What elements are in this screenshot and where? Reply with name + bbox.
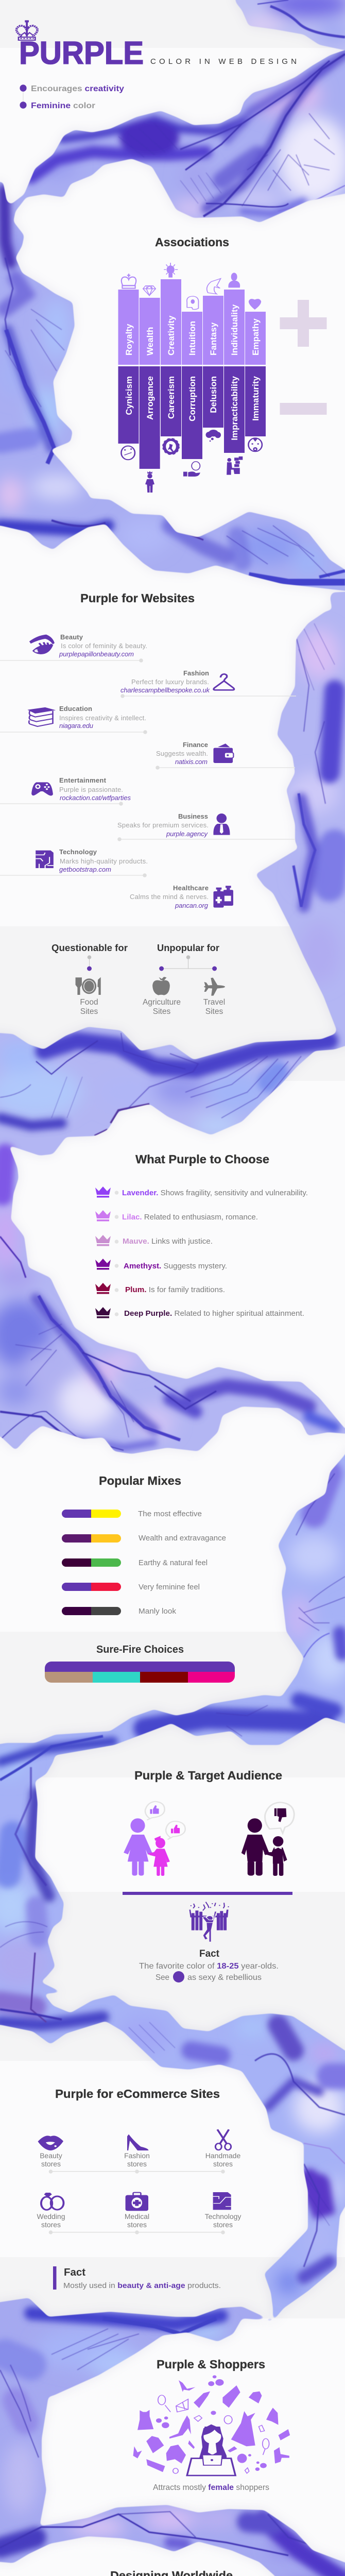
item: agriculture sites: Agriculture: [143, 998, 181, 1007]
item: food sites: Sites: [80, 1007, 98, 1016]
chart: negative associations: Arrogance: [145, 376, 155, 420]
heading: questionable for: Questionable for: [51, 943, 128, 953]
chart: positive associations: Creativity: [166, 315, 176, 355]
row: fashion: Fashion: [183, 669, 209, 677]
chart: negative associations: Delusion: [209, 376, 218, 413]
divider bar: [123, 1892, 292, 1895]
row: beauty: Is color of feminity & beauty.: [61, 642, 147, 650]
ribbon: upper swirl and left column: [0, 26, 345, 618]
chart: negative associations: Careerism: [166, 376, 176, 419]
row: finance: natixis.com: [175, 758, 208, 766]
chart: positive associations: Fantasy: [209, 322, 218, 355]
connectors: [49, 2170, 225, 2234]
item: agriculture sites: [143, 977, 181, 1016]
item: fashion stores: Fashion: [124, 2151, 150, 2160]
chart: negative associations: Impracticability: [230, 376, 239, 440]
item: handmade stores: stores: [213, 2160, 233, 2168]
chart: negative associations: Immaturity: [251, 376, 261, 421]
heading: popular mixes: Popular Mixes: [99, 1474, 181, 1487]
icon: royal crown: [16, 20, 38, 40]
row: fashion: Perfect for luxury brands.: [131, 678, 209, 686]
chart: negative associations: Corruption: [187, 376, 197, 421]
mix: plum and charcoal: Manly look: [139, 1607, 177, 1616]
row: technology: getbootstrap.com: [59, 866, 111, 873]
row: technology: Technology: [59, 848, 97, 856]
item: mauve: [95, 1235, 213, 1246]
row: healthcare: Calms the mind & nerves.: [130, 893, 209, 901]
flow bands: [0, 2313, 345, 2576]
text: mostly used: Mostly used in beauty & anti-age products.: [63, 2282, 221, 2290]
panel: sure-fire choices: [45, 1644, 235, 1683]
ribbon: shoppers band and lower wave: [0, 2282, 345, 2576]
ribbon: right column, wide band and second swirl: [0, 577, 345, 1463]
heading: what purple to choose: What Purple to Choose: [135, 1153, 269, 1166]
item: wedding stores: stores: [41, 2221, 61, 2229]
chart: positive associations: Intuition: [187, 321, 197, 355]
item: fashion stores: [124, 2134, 150, 2168]
item: deep purple: Deep Purple. Related to higher spiritual attainment.: [124, 1309, 304, 1318]
item: food sites: [76, 977, 101, 1016]
row: healthcare: pancan.org: [175, 902, 209, 909]
item: lilac: [95, 1210, 258, 1222]
row: entertainment: rockaction.cat/wtfparties: [60, 794, 131, 802]
row: finance: Suggests wealth.: [156, 750, 208, 757]
item: plum: [95, 1283, 225, 1294]
bullet: feminine color: Feminine color: [31, 101, 95, 110]
item: travel sites: Sites: [205, 1007, 223, 1016]
item: handmade stores: [205, 2129, 240, 2168]
fact accent bar: [53, 2266, 57, 2290]
mix: plum and charcoal: [62, 1607, 177, 1616]
figure: father and son: [242, 1802, 294, 1876]
figure: mother and daughter: [124, 1802, 185, 1876]
item: beauty stores: Beauty: [40, 2151, 62, 2160]
chart: positive associations: Individuality: [230, 304, 239, 355]
flow bands: [0, 1473, 345, 2277]
row: entertainment: Purple is passionate.: [59, 786, 123, 793]
row: entertainment: Entertainment: [59, 776, 107, 784]
swatch bar: [45, 1662, 235, 1683]
item: agriculture sites: Sites: [153, 1007, 170, 1016]
heading: purple and target audience: Purple & Target Audience: [134, 1769, 282, 1782]
item: travel sites: [203, 978, 225, 1016]
chart: positive associations: Wealth: [145, 327, 155, 355]
illustration: shopper and goods: [133, 2375, 290, 2476]
icons: top row: [122, 263, 261, 310]
flow bands: [0, 690, 335, 1448]
row: business: Speaks for premium services.: [117, 821, 209, 829]
icon: crowd at party: [189, 1902, 229, 1942]
ribbon: right column, audience wave, left column and lower swirl: [0, 1422, 345, 2339]
item: deep purple: [95, 1307, 304, 1318]
mix: dark purple and gold: [62, 1534, 226, 1543]
mix: purple and red: Very feminine feel: [139, 1583, 200, 1591]
row: technology: [0, 848, 148, 877]
panel: what purple to choose: [95, 1153, 308, 1318]
item: technology stores: [205, 2192, 241, 2229]
bullet: encourages creativity: Encourages creativity: [31, 84, 124, 93]
item: travel sites: Travel: [203, 998, 225, 1007]
icon: minus: [280, 403, 326, 415]
flow bands: [0, 54, 345, 562]
row: entertainment: [0, 776, 131, 806]
title: PURPLE: [19, 36, 144, 71]
icons: bottom row: [121, 430, 262, 493]
item: beauty stores: stores: [41, 2160, 61, 2168]
heading: purple for ecommerce: Purple for eCommerce Sites: [55, 2087, 220, 2100]
item: lavender: Lavender. Shows fragility, sensitivity and vulnerability.: [122, 1189, 308, 1197]
row: education: Inspires creativity & intellect.: [59, 714, 146, 722]
item: medical stores: Medical: [125, 2212, 149, 2221]
panel: target audience: [123, 1769, 294, 1982]
panel: purple for websites: [0, 591, 296, 909]
heading: purple for websites: Purple for Websites: [80, 591, 195, 605]
item: technology stores: stores: [213, 2221, 233, 2229]
row: healthcare: [130, 884, 233, 909]
mix: dark purple and gold: Wealth and extravagance: [139, 1534, 226, 1543]
item: lavender: [95, 1187, 308, 1197]
bullet connector: [23, 91, 24, 102]
heading: fact: Fact: [64, 2267, 85, 2278]
text: see purple as sexy: as sexy & rebellious: [187, 1973, 262, 1982]
row: finance: [156, 741, 295, 770]
panel: ecommerce sites: [37, 2087, 241, 2290]
item: wedding stores: Wedding: [37, 2212, 65, 2221]
row: healthcare: Healthcare: [173, 884, 209, 892]
row: education: [0, 705, 147, 734]
row: education: niagara.edu: [59, 722, 93, 730]
item: medical stores: stores: [127, 2221, 147, 2229]
header: [16, 20, 297, 110]
heading: associations: Associations: [155, 235, 229, 249]
item: lilac: Lilac. Related to enthusiasm, romance.: [122, 1213, 258, 1222]
mix: plum and green: [62, 1558, 208, 1567]
item: fashion stores: stores: [127, 2160, 147, 2168]
row: finance: Finance: [183, 741, 208, 749]
heading: unpopular for: Unpopular for: [157, 943, 219, 953]
row: business: [117, 812, 295, 841]
row: beauty: purplepapillonbeauty.com: [59, 650, 134, 658]
row: beauty: [0, 633, 147, 663]
panel: questionable and unpopular: [51, 943, 225, 1016]
connector: unpopular: [159, 955, 217, 971]
ribbon: top right corner: [235, 0, 345, 50]
item: handmade stores: Handmade: [205, 2151, 240, 2160]
item: beauty stores: [38, 2136, 63, 2168]
row: technology: Marks high-quality products.: [60, 857, 148, 865]
text: see purple as sexy: See: [156, 1973, 169, 1982]
heading: fact: Fact: [199, 1948, 220, 1959]
panel: popular mixes: [62, 1474, 226, 1616]
item: medical stores: [125, 2193, 149, 2229]
item: amethyst: Amethyst. Suggests mystery.: [124, 1262, 227, 1270]
chart: negative associations: [118, 366, 266, 469]
mix: purple and yellow: The most effective: [138, 1510, 202, 1518]
item: wedding stores: [37, 2193, 65, 2229]
chart: positive associations: [118, 279, 266, 365]
heading: purple and shoppers: Purple & Shoppers: [157, 2358, 265, 2371]
text: attracts female shoppers: Attracts mostly female shoppers: [153, 2483, 269, 2492]
chart: positive associations: Royalty: [124, 324, 134, 355]
panel: purple and shoppers: [133, 2358, 290, 2492]
row: education: Education: [59, 705, 92, 713]
item: food sites: Food: [80, 998, 98, 1007]
row: business: Business: [178, 812, 208, 820]
connector: questionable: [87, 955, 92, 971]
row: beauty: Beauty: [60, 633, 83, 641]
icon: plus: [280, 300, 326, 347]
panel: associations: [118, 235, 326, 493]
item: technology stores: Technology: [205, 2212, 241, 2221]
subtitle: COLOR IN WEB DESIGN: [150, 57, 297, 66]
item: plum: Plum. Is for family traditions.: [125, 1285, 225, 1294]
item: amethyst: [95, 1259, 227, 1270]
chart: positive associations: Empathy: [251, 318, 261, 355]
mix: plum and green: Earthy & natural feel: [139, 1558, 208, 1567]
row: fashion: [120, 669, 296, 698]
row: fashion: charlescampbellbespoke.co.uk: [120, 686, 210, 694]
text: see purple as sexy: [156, 1971, 262, 1982]
row: business: purple.agency: [166, 830, 208, 838]
text: favorite color: The favorite color of 18-25 year-olds.: [139, 1962, 279, 1971]
heading: sure-fire choices: Sure-Fire Choices: [96, 1644, 184, 1655]
item: mauve: Mauve. Links with justice.: [123, 1237, 213, 1246]
chart: negative associations: Cynicism: [124, 376, 134, 415]
mix: purple and red: [62, 1583, 200, 1591]
mix: purple and yellow: [62, 1510, 202, 1518]
